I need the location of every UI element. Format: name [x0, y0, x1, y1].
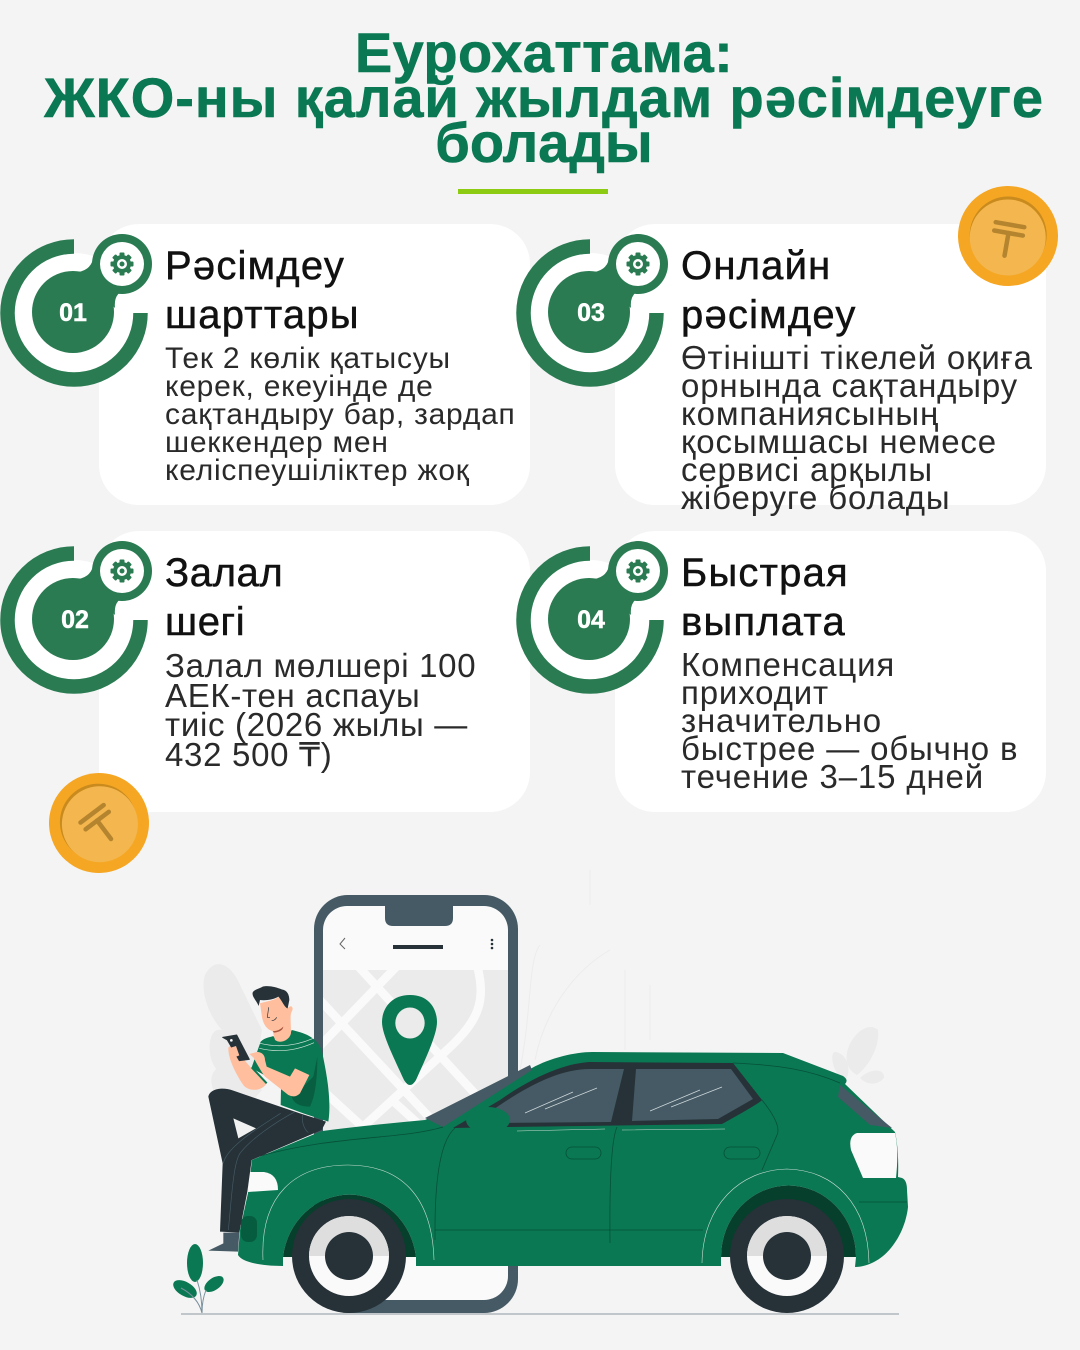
icon: number badge 03 [516, 234, 668, 387]
text: card 02: АЕК-тен аспауы [165, 677, 420, 714]
handset [223, 1035, 249, 1061]
legs [208, 1089, 326, 1233]
facial features [267, 1007, 277, 1021]
text: card 04 [681, 646, 1018, 795]
panel: card 01 [99, 224, 530, 505]
text: card 02 [165, 647, 476, 773]
heading: card 01: шарттары [165, 292, 360, 336]
arm: right [249, 1052, 309, 1096]
title [44, 21, 1044, 174]
icon: number badge 01: 01 [59, 299, 87, 327]
man [208, 986, 329, 1252]
map pin [382, 995, 437, 1085]
phone [314, 895, 518, 1313]
text: card 01: шеккендер мен [165, 426, 389, 459]
icon: number badge 02: 02 [61, 606, 89, 634]
title: Еурохаттама: [355, 21, 733, 84]
title: ЖКО-ны қалай жылдам рәсімдеуге [44, 66, 1044, 129]
heading: card 01: Рәсімдеу [165, 244, 345, 288]
text: card 02: 432 500 ₸) [165, 736, 332, 773]
heading: card 03: Онлайн [681, 244, 831, 288]
text: card 01: керек, екеуінде де [165, 370, 434, 403]
icon: tenge coin top right [958, 186, 1058, 286]
heading: card 04: Быстрая [681, 551, 849, 595]
heading: card 02 [165, 551, 283, 644]
icon: number badge 04: 04 [577, 606, 605, 634]
text: card 02: Залал мөлшері 100 [165, 647, 476, 684]
text: card 01: Тек 2 көлік қатысуы [165, 342, 451, 375]
text: card 03: компаниясының [681, 395, 939, 432]
text: card 01: келіспеушіліктер жоқ [165, 454, 470, 487]
panel: card 04 [615, 531, 1046, 812]
text: card 03 [681, 339, 1033, 516]
illustration: man with phone and car [173, 895, 908, 1315]
shoe [208, 1233, 239, 1252]
lights [248, 1172, 278, 1192]
heading: card 04 [681, 551, 849, 644]
windows [453, 1062, 762, 1128]
background leaves [204, 964, 884, 1115]
face [260, 997, 293, 1042]
text: card 04: быстрее — обычно в [681, 730, 1018, 767]
wheels [292, 1199, 844, 1313]
icon: number badge 03: 03 [577, 299, 605, 327]
text: card 04: течение 3–15 дней [681, 758, 984, 795]
text: card 01 [165, 342, 516, 487]
text: card 04: значительно [681, 702, 882, 739]
heading: card 02: шегі [165, 600, 245, 644]
icon: number badge 04 [516, 541, 668, 694]
text: card 01: сақтандыру бар, зардап [165, 398, 516, 431]
hair [253, 986, 289, 1008]
title: болады [435, 111, 653, 174]
map [318, 965, 509, 1130]
heading: card 01 [165, 244, 360, 337]
heading: card 04: выплата [681, 600, 846, 644]
panel: card 02 [99, 531, 530, 812]
car [238, 1052, 908, 1313]
text: card 03: қосымшасы немесе [681, 423, 997, 460]
text: card 04: Компенсация [681, 646, 895, 683]
panel: card 03 [615, 224, 1046, 505]
text: card 03: Өтінішті тікелей оқиға [681, 339, 1033, 376]
windshield pillar [425, 1065, 532, 1127]
icon: tenge coin bottom left [49, 773, 149, 873]
text: card 03: орнында сақтандыру [681, 367, 1018, 404]
heading: card 03 [681, 244, 857, 337]
title underline [458, 189, 608, 194]
icon: number badge 01 [0, 234, 152, 387]
ground line [181, 1313, 899, 1315]
heading: card 03: рәсімдеу [681, 292, 857, 336]
arm: left [228, 1046, 267, 1090]
text: card 03: жіберуге болады [681, 479, 950, 516]
phone UI [340, 938, 345, 949]
text: card 03: сервисі арқылы [681, 451, 933, 488]
heading: card 02: Залал [165, 551, 283, 595]
icon: number badge 02 [0, 541, 152, 694]
text: card 04: приходит [681, 674, 829, 711]
mirror [466, 1107, 510, 1133]
plant [170, 1244, 226, 1313]
shirt [252, 1030, 329, 1122]
text: card 02: тиіс (2026 жылы — [165, 706, 468, 743]
body lines [253, 1063, 907, 1243]
fingers [228, 1046, 239, 1058]
